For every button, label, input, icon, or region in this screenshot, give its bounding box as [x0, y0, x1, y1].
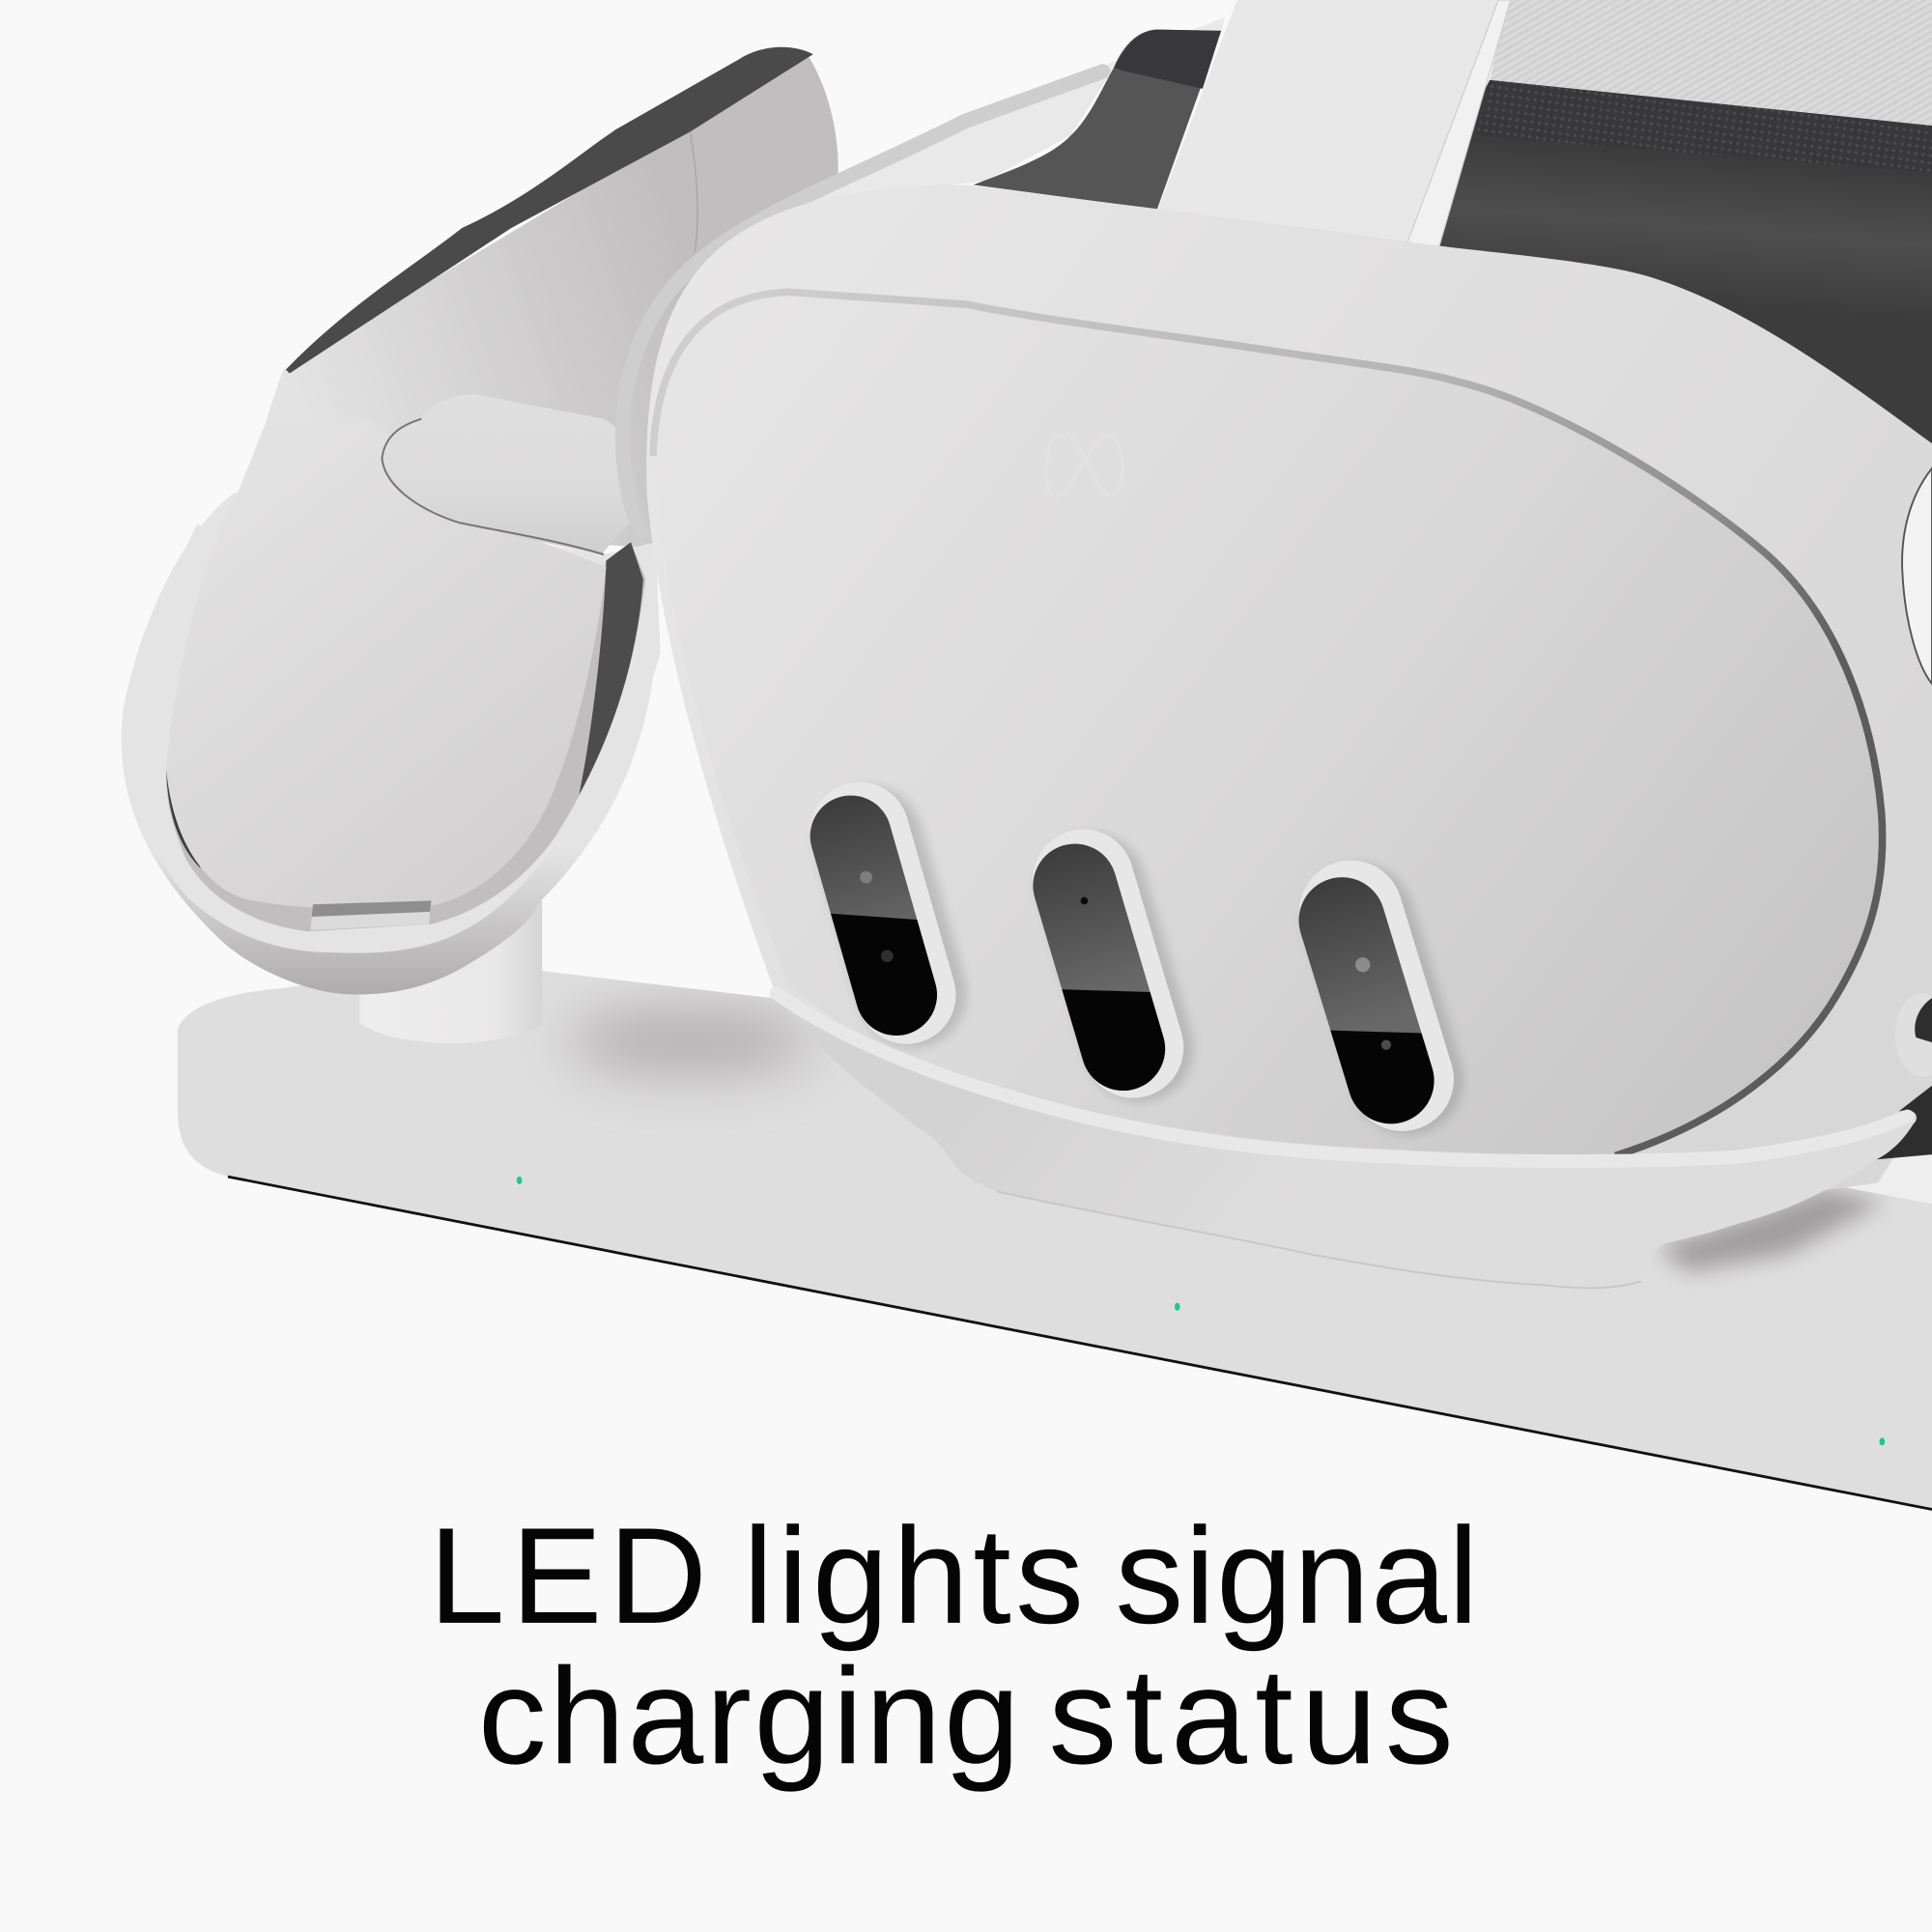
LED indicator right [1880, 1437, 1885, 1445]
headline line 1: LED [429, 1500, 713, 1653]
headset [623, 0, 1932, 1288]
controller dark band [286, 47, 813, 373]
button shadow line [382, 419, 604, 554]
handle seam [690, 131, 697, 252]
dark left cavity [974, 30, 1221, 210]
controller [122, 47, 838, 994]
camera 1 [810, 782, 970, 1051]
cradle lower edge shadow [997, 1191, 1641, 1288]
headline line 2: charging [478, 1640, 1022, 1793]
cradle lip [777, 993, 1907, 1161]
ring tube [150, 529, 640, 940]
dark strap behind cradle [1877, 1086, 1932, 1159]
controller ring [122, 493, 661, 994]
dark interior [1397, 80, 1932, 493]
side knob [1902, 469, 1932, 684]
meta logo [1046, 434, 1122, 496]
front plate [653, 292, 1883, 1220]
controller grip [166, 419, 607, 909]
charging dock base [178, 970, 1932, 1509]
headset cradle [773, 984, 1917, 1288]
headline [429, 1500, 1480, 1793]
top shell [788, 17, 1225, 210]
strap edge [1406, 0, 1511, 246]
thumb button [382, 394, 635, 554]
LED indicator middle [1175, 1303, 1180, 1311]
main strap [1157, 0, 1498, 246]
headline line 1: lights [743, 1500, 1088, 1653]
padded mesh band [1476, 80, 1932, 173]
braided cable [623, 71, 1103, 532]
controller handle [241, 54, 838, 549]
upper mesh left [1114, 30, 1221, 89]
rear ledge [1834, 1154, 1932, 1204]
headline line 2: status [1048, 1640, 1462, 1793]
camera 3 [1298, 860, 1466, 1137]
side port [1895, 993, 1932, 1077]
headset body [646, 185, 1932, 1220]
LED indicator left [517, 1177, 522, 1184]
camera 2 [1033, 829, 1196, 1105]
dark gap [579, 542, 643, 795]
plate groove [653, 292, 1883, 1155]
back strap [1490, 0, 1932, 126]
lining [166, 542, 645, 931]
charging stem [359, 900, 542, 1043]
battery slot [310, 900, 431, 930]
headline line 1: signal [1115, 1500, 1480, 1653]
